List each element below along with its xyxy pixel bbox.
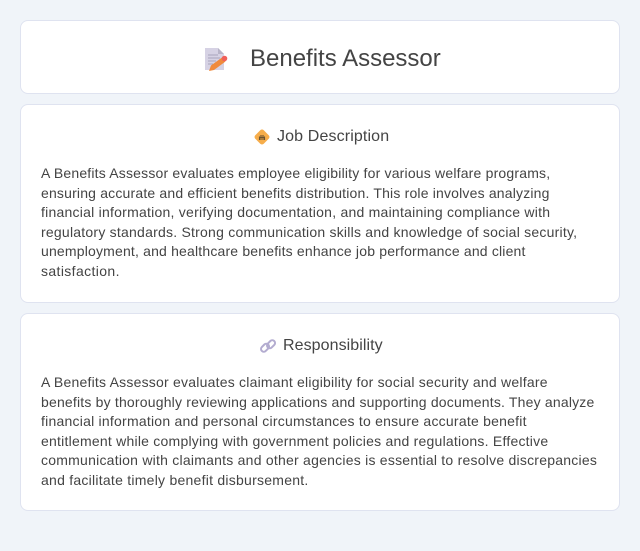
panel: responsibility <box>20 313 620 511</box>
text: responsibility body: communication with claimants and other agencies is essential to resolve discrepancies <box>41 452 597 468</box>
text: job description body <box>41 165 577 279</box>
text: job description body: ensuring accurate and efficient benefits distribution. This role involves analyzing <box>41 185 550 201</box>
text: job description body: A Benefits Assessor evaluates employee eligibility for various welfare programs, <box>41 165 550 181</box>
icon: document with pencil <box>205 48 228 71</box>
text: responsibility body: and facilitate timely benefit disbursement. <box>41 472 309 488</box>
heading: Benefits Assessor: Benefits Assessor <box>250 45 441 72</box>
text: job description body: unemployment, and healthcare benefits enhance job performance and client <box>41 243 526 259</box>
text: job description body: financial information, verifying documentation, and maintaining compliance with <box>41 204 550 220</box>
panel: title <box>20 20 620 94</box>
icon: orange diamond sign <box>254 130 270 144</box>
text: job description body: satisfaction. <box>41 263 120 279</box>
panel: job description <box>20 104 620 303</box>
text: responsibility body: entitlement while complying with government policies and regulations. Effective <box>41 433 548 449</box>
heading: Job Description: Job Description <box>277 128 389 145</box>
text: responsibility body: financial information and personal circumstances to ensure accurate benefit <box>41 413 527 429</box>
text: responsibility body: benefits by thoroughly reviewing applications and supporting documents. They analyze <box>41 394 594 410</box>
text: responsibility body <box>41 374 597 488</box>
heading: Responsibility: Responsibility <box>283 337 383 354</box>
text: job description body: regulatory standards. Strong communication skills and knowledge of social security, <box>41 224 577 240</box>
text: responsibility body: A Benefits Assessor evaluates claimant eligibility for social security and welfare <box>41 374 548 390</box>
icon: chain link <box>260 339 276 353</box>
